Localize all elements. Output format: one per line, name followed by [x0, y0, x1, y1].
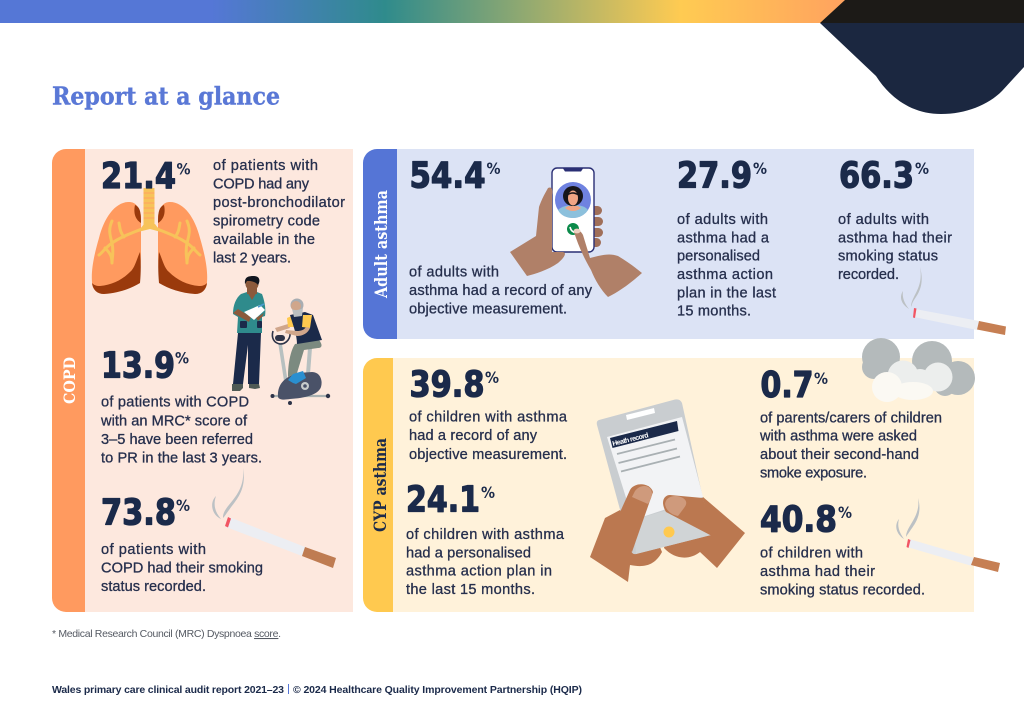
stat: adult smoking status: 66.3: [839, 156, 914, 196]
stat: COPD referral to PR: to PR in the last 3 years.: [101, 450, 262, 466]
stat: CYP smoking status: smoking status recorded.: [760, 582, 925, 598]
stat: adult action plan: %: [753, 159, 767, 178]
Adult asthma label: Adult asthma: [372, 190, 391, 299]
CYP asthma label: CYP asthma: [371, 438, 390, 532]
stat: CYP action plan: the last 15 months.: [406, 582, 535, 598]
stat: COPD smoking status: of patients with: [101, 542, 206, 558]
cigarette: COPD: [212, 468, 336, 568]
stat: adult objective measurement: asthma had a record of any: [409, 283, 593, 299]
icon: lungs: [92, 188, 207, 294]
stat: adult objective measurement: of adults with: [409, 265, 499, 281]
panel: Adult asthma: [363, 149, 974, 339]
header gradient bar: [0, 0, 1024, 23]
stat: COPD spirometry: %: [176, 160, 190, 178]
stat: adult objective measurement: [409, 156, 593, 317]
stat: COPD spirometry: 21.4: [101, 156, 176, 197]
stat: CYP objective measurement: [409, 364, 568, 463]
stat: adult action plan: asthma had a: [677, 230, 770, 246]
COPD label: COPD: [60, 357, 79, 404]
stat: adult smoking status: [838, 156, 952, 283]
stat: adult action plan: plan in the last: [677, 285, 776, 301]
stat: CYP objective measurement: of children with asthma: [409, 410, 568, 426]
stat: CYP second-hand smoke: %: [814, 369, 828, 388]
stat: CYP action plan: asthma action plan in: [406, 564, 552, 580]
stat: adult objective measurement: 54.4: [410, 156, 486, 196]
stat: COPD spirometry: COPD had any: [213, 176, 310, 192]
stat: CYP action plan: %: [481, 483, 495, 502]
stat: adult action plan: 27.9: [677, 156, 752, 196]
stat: CYP smoking status: [760, 500, 925, 598]
stat: adult action plan: of adults with: [677, 212, 768, 228]
header navy shape: [820, 23, 1024, 114]
stat: CYP second-hand smoke: of parents/carers of children: [760, 410, 942, 426]
stat: adult smoking status: smoking status: [838, 249, 938, 265]
stat: adult smoking status: %: [915, 159, 929, 178]
stat: COPD referral to PR: 3–5 have been referred: [101, 432, 253, 448]
stat: adult smoking status: of adults with: [838, 212, 929, 228]
panel: CYP asthma: [363, 358, 974, 612]
icon: patient on exercise bike: [270, 298, 330, 405]
footnote: * Medical Research Council (MRC) Dyspnoea score.: [52, 628, 281, 640]
stat: COPD referral to PR: [100, 346, 262, 466]
footer: [52, 684, 582, 696]
stat: CYP smoking status: asthma had their: [760, 564, 875, 580]
health record caption: Heath record: [612, 432, 649, 448]
stat: CYP second-hand smoke: 0.7: [760, 365, 814, 406]
footer: Wales primary care clinical audit report 2021–23: [52, 684, 284, 696]
stat: CYP objective measurement: objective measurement.: [409, 447, 567, 463]
stat: CYP second-hand smoke: with asthma were asked: [759, 429, 917, 445]
stat: CYP objective measurement: %: [485, 368, 499, 387]
stat: adult smoking status: recorded.: [838, 267, 899, 283]
stat: adult action plan: [677, 156, 776, 320]
icon: smoke cloud: [862, 338, 975, 402]
stat: adult objective measurement: objective measurement.: [409, 301, 567, 317]
stat: COPD spirometry: of patients with: [213, 158, 318, 174]
title: Report at a glance: [52, 82, 280, 110]
stat: COPD spirometry: available in the: [213, 232, 315, 248]
stat: CYP smoking status: %: [838, 503, 852, 522]
stat: adult objective measurement: %: [486, 159, 500, 178]
stat: adult action plan: personalised: [677, 249, 760, 265]
stat: COPD smoking status: status recorded.: [101, 579, 206, 595]
stat: adult smoking status: asthma had their: [838, 230, 952, 246]
stat: CYP objective measurement: 39.8: [410, 364, 484, 406]
stat: COPD referral to PR: of patients with COPD: [101, 395, 249, 411]
stat: COPD spirometry: last 2 years.: [213, 250, 291, 266]
stat: CYP second-hand smoke: about their second-hand: [760, 447, 919, 463]
stat: COPD referral to PR: 13.9: [101, 346, 175, 386]
stat: COPD smoking status: %: [176, 496, 190, 515]
stat: adult action plan: asthma action: [677, 267, 773, 283]
stat: COPD smoking status: 73.8: [101, 492, 176, 534]
stat: COPD smoking status: [101, 492, 263, 595]
stat: COPD spirometry: [101, 156, 345, 266]
stat: CYP smoking status: 40.8: [760, 500, 837, 540]
cigarette: adult asthma: [901, 267, 1006, 335]
stat: CYP action plan: had a personalised: [406, 545, 531, 561]
stat: COPD referral to PR: %: [175, 348, 189, 368]
stat: CYP smoking status: of children with: [760, 545, 863, 561]
stat: COPD spirometry: post-bronchodilator: [213, 195, 345, 211]
stat: CYP action plan: of children with asthma: [406, 527, 565, 543]
stat: CYP second-hand smoke: [759, 365, 942, 481]
stat: CYP objective measurement: had a record of any: [409, 428, 538, 444]
stat: CYP second-hand smoke: smoke exposure.: [760, 465, 867, 481]
stat: CYP action plan: [406, 480, 565, 598]
stat: COPD referral to PR: with an MRC* score of: [100, 414, 248, 430]
stat: COPD smoking status: COPD had their smoking: [101, 561, 263, 577]
cigarette: CYP asthma: [896, 498, 1000, 572]
icon: hand holding phone (adult asthma): [510, 168, 642, 297]
panel: COPD: [52, 149, 353, 612]
stat: COPD spirometry: spirometry code: [213, 214, 320, 230]
stat: CYP action plan: 24.1: [406, 480, 480, 520]
icon: hands holding health record phone: [590, 399, 745, 582]
footer: © 2024 Healthcare Quality Improvement Partnership (HQIP): [293, 684, 582, 696]
stat: adult action plan: 15 months.: [677, 304, 751, 320]
icon: nurse: [232, 276, 265, 391]
